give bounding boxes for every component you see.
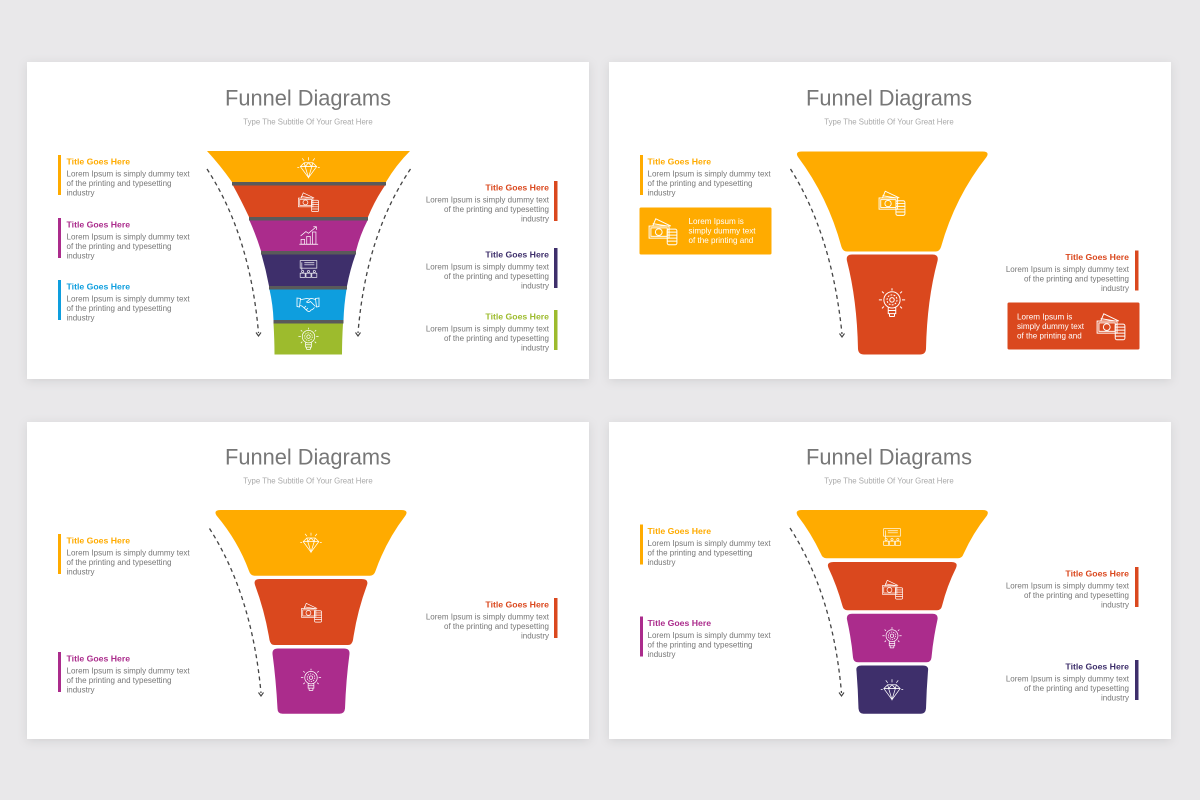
icon: light bulb — [298, 328, 319, 349]
text block: green: industry — [521, 344, 549, 352]
arrow: left dashed — [207, 169, 261, 336]
text block: red: industry — [521, 214, 549, 224]
callout: red: of the printing and — [1017, 332, 1082, 340]
funnel: four stages — [797, 510, 988, 714]
text block: purple: Lorem Ipsum is simply dummy text — [66, 666, 190, 676]
text block: orange: industry — [648, 188, 676, 198]
text block: orange: Title Goes Here — [66, 156, 130, 166]
icon: light bulb — [301, 669, 321, 690]
text block: orange: Title Goes Here — [66, 536, 130, 546]
arrow: dashed — [790, 169, 844, 337]
text block: orange: of the printing and typesetting — [66, 558, 171, 567]
arrow: dashed — [790, 528, 844, 696]
text block: green — [426, 310, 558, 352]
panel: three-stage funnel — [27, 422, 589, 739]
heading: Funnel Diagrams — [225, 86, 391, 110]
text block: orange: of the printing and typesetting — [648, 179, 752, 188]
text block: navy: Lorem Ipsum is simply dummy text — [1006, 674, 1130, 684]
callout: red — [1008, 302, 1140, 350]
text block: red: Title Goes Here — [1065, 252, 1129, 262]
text block: red — [1006, 567, 1138, 610]
arrow: dashed — [210, 528, 264, 696]
heading: Funnel Diagrams — [225, 444, 391, 470]
subtitle: Type The Subtitle Of Your Great Here — [243, 476, 373, 486]
text block: blue: of the printing and typesetting — [66, 304, 171, 313]
text block: navy — [1006, 660, 1138, 702]
text block: purple: Title Goes Here — [66, 654, 130, 664]
heading: Funnel Diagrams — [806, 86, 972, 110]
text block: navy: industry — [1101, 694, 1129, 702]
icon: presentation board — [300, 261, 317, 277]
text block: orange: Title Goes Here — [648, 526, 711, 536]
panel: six-stage funnel — [27, 62, 589, 379]
text block: blue: industry — [66, 314, 95, 322]
text block: red: Lorem Ipsum is simply dummy text — [1006, 582, 1130, 590]
text block: purple: of the printing and typesetting — [66, 242, 171, 251]
funnel: two stages — [797, 152, 988, 354]
callout: red: Lorem Ipsum is — [1017, 312, 1072, 322]
arrow: right dashed — [356, 169, 410, 336]
text block: orange — [640, 155, 771, 198]
text block: red — [1006, 250, 1138, 293]
text block: purple: of the printing and typesetting — [648, 640, 752, 650]
text block: blue: Lorem Ipsum is simply dummy text — [66, 294, 190, 304]
text block: navy: of the printing and typesetting — [444, 272, 549, 281]
text block: orange: of the printing and typesetting — [66, 179, 171, 188]
funnel: three stages — [215, 510, 407, 714]
heading: Funnel Diagrams — [806, 444, 972, 470]
icon: money — [882, 580, 903, 599]
callout: orange: of the printing and — [688, 236, 753, 245]
text block: purple: industry — [66, 686, 95, 694]
text block: orange — [58, 155, 190, 198]
text block: purple: industry — [648, 650, 676, 659]
text block: red: Title Goes Here — [1065, 568, 1129, 578]
text block: red: industry — [1101, 600, 1129, 610]
text block: red: industry — [521, 632, 549, 640]
icon: money — [298, 193, 319, 212]
text block: orange: Lorem Ipsum is simply dummy text — [66, 170, 190, 178]
icon: light bulb — [879, 288, 905, 316]
text block: purple: Title Goes Here — [66, 220, 130, 230]
text block: orange: Lorem Ipsum is simply dummy text — [648, 539, 771, 548]
text block: purple: Lorem Ipsum is simply dummy text — [648, 631, 771, 640]
callout: orange: Lorem Ipsum is — [688, 217, 744, 226]
icon: diamond — [297, 157, 320, 178]
icon: money — [301, 603, 322, 622]
icon: diamond — [881, 679, 903, 700]
text block: navy: industry — [521, 282, 549, 290]
icon: light bulb — [882, 627, 902, 648]
text block: purple — [58, 652, 190, 694]
text block: orange: of the printing and typesetting — [648, 548, 752, 558]
text block: orange: industry — [66, 568, 95, 576]
text block: red: of the printing and typesetting — [444, 205, 549, 214]
text block: purple: industry — [66, 252, 95, 260]
text block: purple — [58, 218, 190, 260]
text block: red: of the printing and typesetting — [444, 622, 549, 631]
text block: red: industry — [1101, 284, 1129, 293]
text block: red: Lorem Ipsum is simply dummy text — [1006, 265, 1130, 274]
callout: red: simply dummy text — [1017, 322, 1085, 331]
text block: orange: industry — [648, 558, 676, 567]
text block: green: Lorem Ipsum is simply dummy text — [426, 324, 550, 334]
text block: red — [426, 181, 558, 224]
text block: orange: industry — [66, 188, 95, 198]
text block: navy — [426, 248, 558, 290]
text block: blue: Title Goes Here — [66, 282, 130, 292]
text block: navy: Lorem Ipsum is simply dummy text — [426, 262, 550, 272]
icon: diamond — [300, 533, 322, 552]
icon: growth chart — [299, 227, 318, 244]
funnel: six stages — [207, 151, 410, 354]
icon: handshake — [297, 298, 319, 311]
text block: red: Title Goes Here — [485, 182, 549, 192]
icon: money — [879, 191, 905, 215]
text block: green: of the printing and typesetting — [444, 334, 549, 343]
text block: navy: of the printing and typesetting — [1024, 684, 1129, 693]
text block: orange: Lorem Ipsum is simply dummy text — [648, 170, 771, 178]
panel: four-stage funnel — [609, 422, 1171, 739]
text block: orange: Title Goes Here — [648, 156, 711, 166]
text block: navy: Title Goes Here — [485, 250, 549, 260]
icon: presentation board — [884, 529, 900, 545]
subtitle: Type The Subtitle Of Your Great Here — [824, 118, 954, 126]
callout: orange — [640, 208, 772, 254]
text block: navy: Title Goes Here — [1065, 662, 1129, 672]
text block: purple — [640, 616, 771, 659]
subtitle: Type The Subtitle Of Your Great Here — [243, 118, 373, 126]
panel: two-stage funnel — [609, 62, 1171, 379]
text block: red — [426, 598, 558, 640]
subtitle: Type The Subtitle Of Your Great Here — [824, 476, 954, 486]
text block: red: of the printing and typesetting — [1024, 274, 1129, 284]
text block: blue — [58, 280, 190, 322]
text block: purple: Title Goes Here — [648, 618, 711, 628]
text block: purple: of the printing and typesetting — [66, 676, 171, 685]
text block: orange: Lorem Ipsum is simply dummy text — [66, 548, 190, 558]
text block: purple: Lorem Ipsum is simply dummy text — [66, 232, 190, 242]
text block: red: of the printing and typesetting — [1024, 591, 1129, 600]
text block: orange — [640, 524, 771, 567]
text block: orange — [58, 534, 190, 576]
text block: red: Title Goes Here — [485, 600, 549, 610]
text block: red: Lorem Ipsum is simply dummy text — [426, 612, 550, 622]
callout: orange: simply dummy text — [688, 226, 756, 236]
text block: red: Lorem Ipsum is simply dummy text — [426, 196, 550, 204]
text block: green: Title Goes Here — [485, 312, 549, 322]
